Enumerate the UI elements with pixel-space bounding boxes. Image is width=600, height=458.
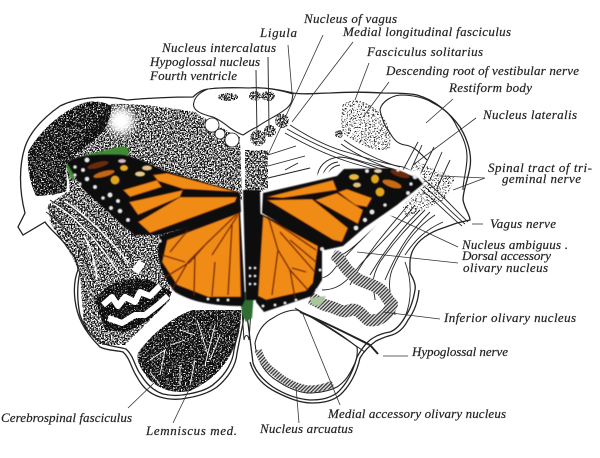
orange wing panels bbox=[123, 173, 372, 300]
white margin dots bbox=[73, 158, 417, 308]
white fibre streaks in pyramid bbox=[150, 320, 220, 385]
label: Fasciculus solitarius: Fasciculus solitarius bbox=[366, 44, 483, 59]
label: Medial longitudinal fasciculus: Medial longitudinal fasciculus bbox=[342, 24, 511, 39]
outer outline of medulla bbox=[18, 88, 471, 403]
stippled region: pyramid dark bbox=[138, 310, 241, 392]
nerve fibre bundles bbox=[268, 125, 468, 317]
white circles by ventricle bbox=[205, 118, 239, 147]
label: Lemniscus med.: Lemniscus med. bbox=[145, 423, 237, 438]
label: Inferior olivary nucleus: Inferior olivary nucleus bbox=[443, 310, 576, 325]
curved fibre streaks in lateral field bbox=[46, 190, 132, 280]
green cut-out remnants bbox=[66, 146, 326, 322]
black wing bodies bbox=[67, 155, 423, 312]
panel: medulla cross-section bbox=[18, 88, 471, 403]
label: Nucleus arcuatus: Nucleus arcuatus bbox=[259, 421, 353, 436]
label: Nucleus intercalatus: Nucleus intercalatus bbox=[161, 40, 276, 55]
ventricular nuclei bbox=[218, 91, 289, 146]
restiform body outline bbox=[380, 95, 467, 190]
left hindwing black bbox=[158, 210, 245, 306]
label: Medial accessory olivary nucleus: Medial accessory olivary nucleus bbox=[327, 406, 506, 421]
wing veins bbox=[162, 213, 316, 298]
label: Dorsal accessory olivary nucleus: Dorsal accessory bbox=[461, 248, 551, 263]
cream and yellow wing spots bbox=[87, 159, 410, 196]
fasciculus solitarius cell group bbox=[335, 101, 390, 149]
fourth ventricle outline bbox=[194, 88, 293, 135]
white patch in reticular field bbox=[108, 108, 134, 134]
left forewing cells bbox=[123, 180, 162, 197]
medullary raphe and hypoglossal nerve bbox=[242, 308, 378, 354]
white fibre streaks in lateral field bbox=[54, 201, 128, 280]
leader lines bbox=[128, 35, 485, 423]
label: Hypoglossal nerve: Hypoglossal nerve bbox=[411, 344, 508, 359]
body bbox=[243, 190, 262, 300]
label: Hypoglossal nucleus: Hypoglossal nucleus bbox=[149, 54, 260, 69]
right hindwing black bbox=[256, 212, 322, 312]
label: Spinal tract of trigeminal nerve: Spinal tract of tri- bbox=[488, 160, 592, 175]
midline stippling bbox=[245, 150, 268, 192]
right hindwing cell bbox=[258, 216, 318, 300]
label: Spinal tract second line: geminal nerve bbox=[502, 171, 581, 186]
butterfly bbox=[66, 146, 425, 322]
label: Restiform body: Restiform body bbox=[448, 80, 532, 95]
stippled spinal trigeminal tract bbox=[400, 160, 455, 218]
label: Nucleus of vagus: Nucleus of vagus bbox=[303, 11, 397, 26]
label: Fourth ventricle: Fourth ventricle bbox=[149, 68, 237, 83]
inferior olivary nucleus bbox=[310, 254, 392, 320]
left hindwing cells bbox=[162, 213, 241, 297]
label: Nucleus lateralis: Nucleus lateralis bbox=[482, 107, 577, 122]
left forewing black bbox=[67, 155, 241, 235]
stippled region: central reticular field bbox=[48, 104, 242, 345]
arcuate nucleus oval bbox=[255, 310, 357, 393]
label: Vagus nerve: Vagus nerve bbox=[490, 216, 556, 231]
label: Dorsal accessory second line: olivary nucleus bbox=[463, 260, 548, 275]
label: Ligula: Ligula bbox=[259, 25, 298, 40]
stippled region: upper left dark bbox=[28, 101, 112, 196]
label: Nucleus ambiguus: Nucleus ambiguus . bbox=[461, 237, 568, 252]
label: Descending root of vestibular nerve: Descending root of vestibular nerve bbox=[385, 63, 579, 78]
right forewing cells bbox=[267, 180, 337, 198]
right forewing black bbox=[262, 168, 423, 250]
label: Cerebrospinal fasciculus: Cerebrospinal fasciculus bbox=[1, 410, 132, 425]
white convoluted lobes bbox=[95, 262, 172, 332]
wing white halo bbox=[262, 168, 425, 315]
hatched arcuate band bbox=[258, 350, 333, 389]
